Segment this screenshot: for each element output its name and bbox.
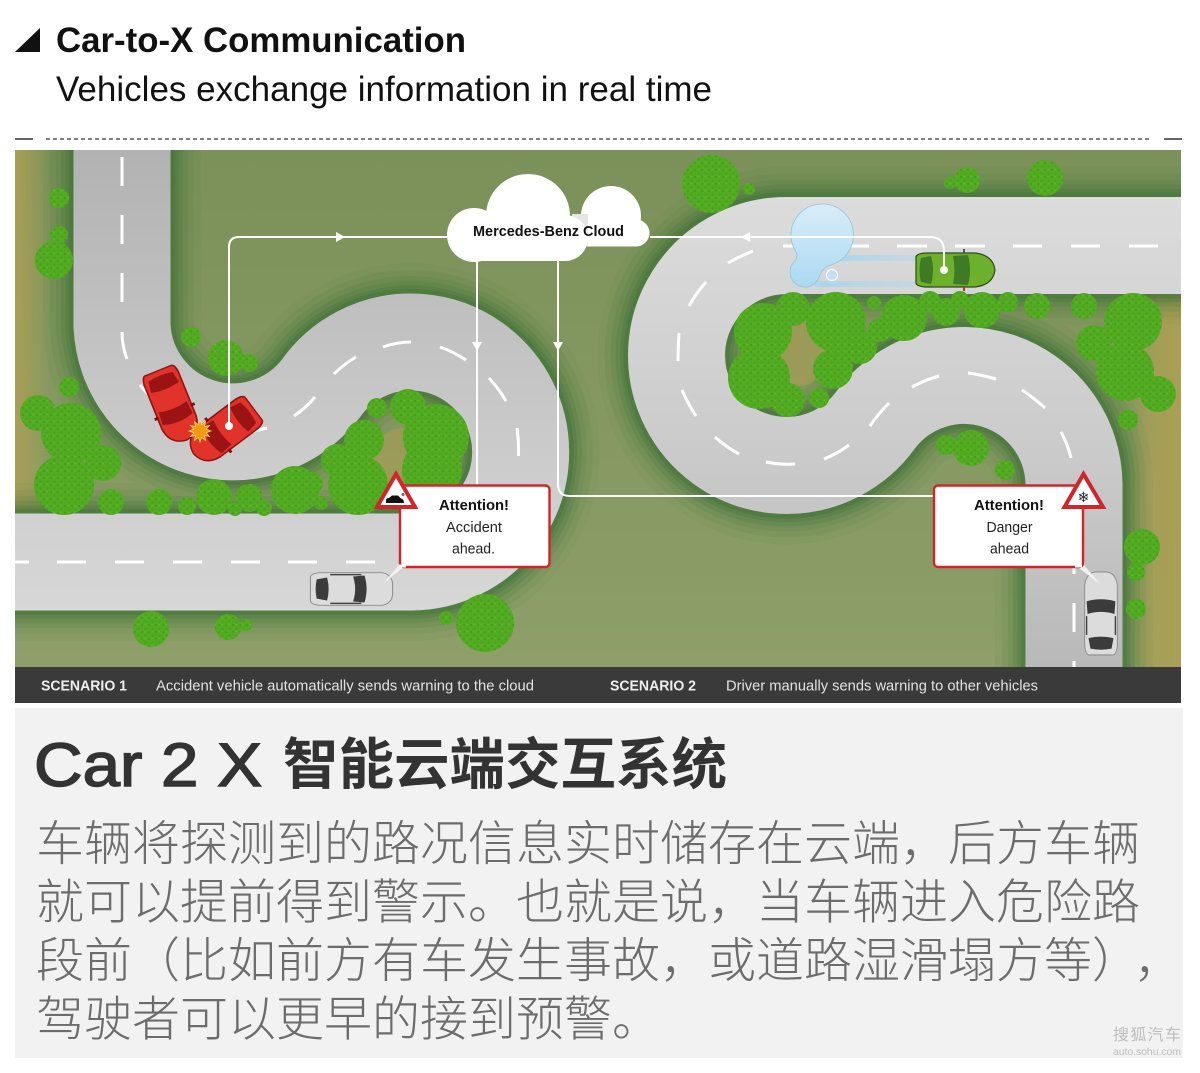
- Chinese heading: 智能云端交互系统: [283, 720, 727, 800]
- arrowheads and vehicle signal dots: [225, 232, 948, 430]
- scenario 1 label: SCENARIO 1: [41, 678, 127, 694]
- Chinese body text: [36, 804, 1182, 1050]
- trees: scenario 2 area: [682, 155, 1176, 619]
- header: section title: [15, 21, 712, 109]
- Chinese body text: 驾驶者可以更早的接到预警。: [36, 980, 660, 1050]
- road: scenario 1: [15, 150, 521, 562]
- panel: road map illustration: [15, 150, 1181, 667]
- heading: Car-to-X Communication: [56, 21, 466, 60]
- callout: accident warning: Accident: [446, 519, 503, 536]
- car: green reporting vehicle: [916, 249, 995, 291]
- car: accident vehicle B: [181, 391, 267, 471]
- road: scenario 2: [677, 245, 1181, 667]
- Chinese body text: 段前（比如前方有车发生事故，或道路湿滑塌方等），: [36, 921, 1182, 991]
- Chinese heading: [34, 720, 727, 800]
- callout: danger warning: [934, 474, 1103, 584]
- cloud: [447, 174, 650, 262]
- icon: black corner triangle: [15, 28, 40, 52]
- Chinese heading: Car 2 X: [34, 731, 262, 799]
- icon: crash burst: [189, 420, 211, 442]
- Chinese body text: 就可以提前得到警示。也就是说，当车辆进入危险路: [36, 862, 1140, 932]
- scenario 1 description: Accident vehicle automatically sends warning to the cloud: [156, 678, 534, 694]
- callout: danger warning: Attention!: [974, 497, 1044, 514]
- communication arrows: [229, 237, 944, 496]
- watermark: 搜狐汽车: [1113, 1021, 1181, 1045]
- callout: danger warning: ahead: [990, 540, 1029, 558]
- callout: accident warning: [377, 474, 550, 584]
- hazard: slippery patch with trails: [790, 204, 916, 287]
- Chinese body text: 车辆将探测到的路况信息实时储存在云端，后方车辆: [36, 804, 1140, 874]
- subheading: Vehicles exchange information in real time: [56, 70, 712, 109]
- car: silver vehicle scenario 2: [1085, 572, 1117, 655]
- trees: scenario 1 area: [20, 188, 514, 652]
- icon: snow warning triangle: ❄: [1078, 490, 1089, 506]
- watermark: [1113, 1021, 1181, 1058]
- car: accident vehicle A: [138, 362, 206, 448]
- scenario 2 description: Driver manually sends warning to other vehicles: [726, 678, 1038, 694]
- icon: snow warning triangle: [1064, 474, 1103, 507]
- callout: accident warning: ahead.: [452, 540, 495, 558]
- icon: accident warning triangle: [377, 474, 415, 507]
- callout: danger warning: Danger: [986, 519, 1032, 536]
- legend bar: scenarios: [15, 667, 1181, 703]
- callout: accident warning: Attention!: [439, 497, 509, 514]
- scenario 2 label: SCENARIO 2: [610, 678, 696, 694]
- lane markings: scenario 2: [678, 246, 1158, 667]
- car: silver vehicle scenario 1: [310, 573, 393, 605]
- cloud label: Mercedes-Benz Cloud: [473, 223, 624, 240]
- watermark: auto.sohu.com: [1113, 1046, 1181, 1058]
- panel: Chinese explanation: [15, 708, 1183, 1058]
- lane markings: scenario 1: [15, 157, 519, 562]
